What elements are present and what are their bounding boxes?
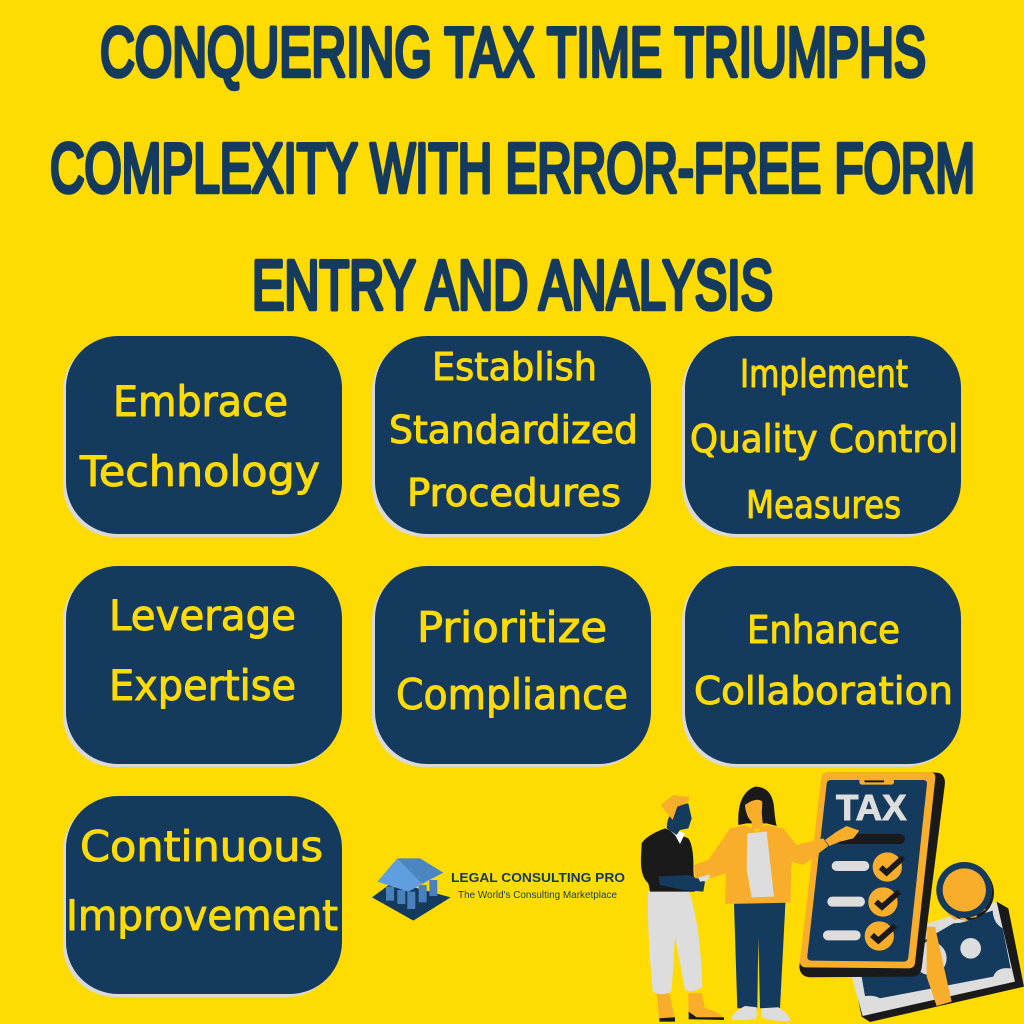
panel: Establish Standardized Procedures: Procedures: [407, 471, 621, 515]
panel: Prioritize Compliance: [372, 566, 651, 767]
panel: Continuous Improvement: [63, 796, 342, 997]
panel: Leverage Expertise: [63, 566, 342, 767]
panel: Embrace Technology: [63, 336, 342, 537]
panel: Implement Quality Control Measures: Quality Control: [690, 417, 958, 461]
figure: man in black jacket: [641, 795, 724, 1022]
logo: Legal Consulting Pro: LEGAL CONSULTING PRO: [451, 870, 625, 885]
panel: Embrace Technology: Technology: [79, 447, 320, 496]
icon: tax clipboard phone: TAX: [836, 787, 907, 828]
icon: courthouse: [372, 858, 451, 921]
icon: tax clipboard phone: [799, 773, 945, 977]
panel: Continuous Improvement: Continuous: [80, 822, 323, 871]
panel: Continuous Improvement: Improvement: [66, 891, 338, 940]
panel: Implement Quality Control Measures: Measures: [746, 483, 901, 527]
figure: woman in orange jacket: [694, 787, 859, 1021]
icon: banknote: [852, 902, 1024, 1022]
panel: Enhance Collaboration: Collaboration: [694, 669, 953, 713]
panel: Enhance Collaboration: Enhance: [747, 608, 900, 652]
title: [50, 13, 975, 324]
title: ENTRY AND ANALYSIS: [252, 246, 773, 324]
panel: Leverage Expertise: Leverage: [109, 591, 296, 640]
panel: Establish Standardized Procedures: Establish: [432, 345, 597, 389]
logo: Legal Consulting Pro: [372, 858, 625, 921]
panel: Prioritize Compliance: Prioritize: [417, 603, 607, 652]
panel: Implement Quality Control Measures: Implement: [740, 352, 908, 396]
panel: Establish Standardized Procedures: Standardized: [389, 408, 638, 452]
panel: Prioritize Compliance: Compliance: [396, 670, 628, 719]
panel: Implement Quality Control Measures: [682, 336, 961, 537]
panel: Enhance Collaboration: [682, 566, 961, 767]
panel: Leverage Expertise: Expertise: [109, 661, 296, 710]
illustration: tax checklist and two people: [641, 773, 1024, 1022]
panel: Establish Standardized Procedures: [372, 336, 651, 537]
icon: coin: [936, 862, 994, 921]
logo: Legal Consulting Pro: The World's Consulting Marketplace: [458, 890, 617, 901]
panel: Embrace Technology: Embrace: [113, 377, 288, 426]
